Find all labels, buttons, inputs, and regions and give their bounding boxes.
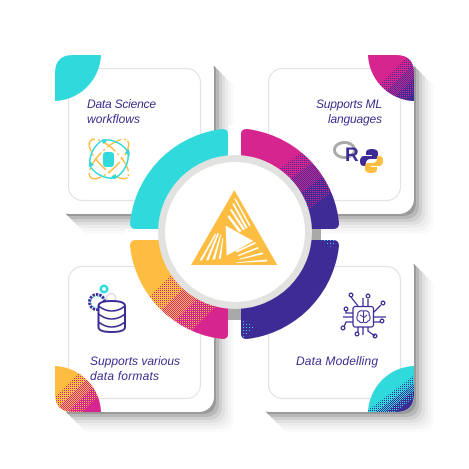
icon: database with gears <box>90 286 125 332</box>
center circle <box>158 155 312 309</box>
icon: atom with database <box>84 134 134 184</box>
panel: supports various data formats <box>55 266 231 429</box>
icon: R and Python logos: R <box>345 145 359 166</box>
heading: data science workflows: workflows <box>87 112 140 126</box>
corner leaf: magenta to purple <box>368 55 414 101</box>
corner leaf: orange to magenta <box>55 366 101 412</box>
icon: brain chip <box>341 293 386 338</box>
logo: spiral triangle <box>191 190 277 265</box>
heading: supports various data formats: Supports various <box>90 354 180 368</box>
heading: data modelling: Data Modelling <box>296 354 378 368</box>
heading: data science workflows: Data Science <box>87 97 156 111</box>
icon: R and Python logos <box>334 142 383 173</box>
arc segment: magenta to purple <box>241 129 339 229</box>
heading: supports various data formats: data formats <box>90 369 159 383</box>
panel: data science workflows <box>55 55 234 234</box>
corner leaf: teal to purple <box>368 366 414 412</box>
arc segment: teal <box>130 129 228 229</box>
gaps between arcs <box>125 125 321 320</box>
arc segment: purple <box>241 240 339 339</box>
panel: supports ML languages <box>268 55 431 231</box>
corner leaf: teal <box>55 55 101 101</box>
heading: supports ML languages: Supports ML <box>316 97 382 111</box>
arc segment: orange to magenta <box>130 240 228 339</box>
panel: data modelling <box>266 264 431 429</box>
heading: supports ML languages: languages <box>328 112 382 126</box>
